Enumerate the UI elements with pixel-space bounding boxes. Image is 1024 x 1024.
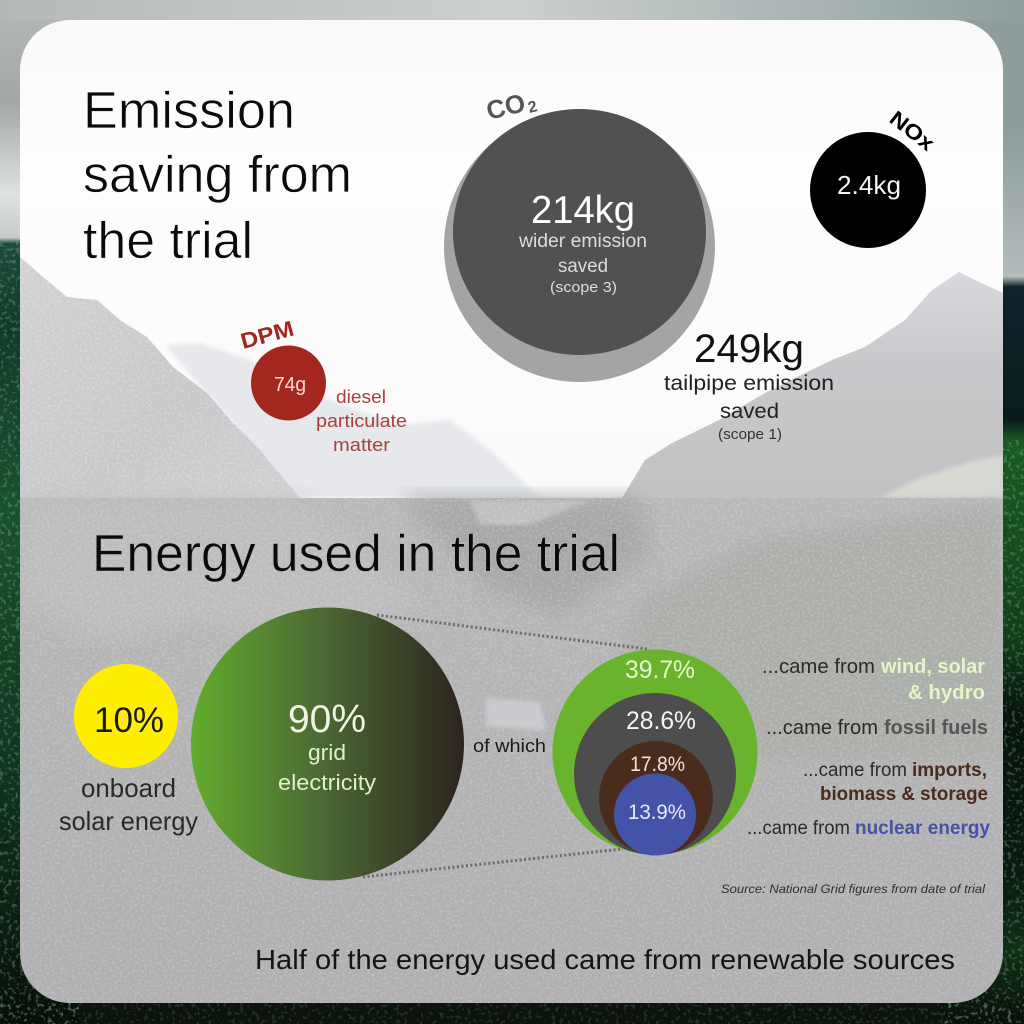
heading: emission saving: saving from [83,146,352,204]
text: diesel particulate matter: matter [333,435,390,455]
legend: imports biomass storage: biomass & storage [820,784,988,805]
circle: imports biomass storage: 17.8% [630,753,685,776]
text: diesel particulate matter: diesel [336,387,386,407]
legend: nuclear energy: ...came from [747,818,850,839]
circle: fossil fuels [574,693,736,855]
chart: NOx circle: 2.4kg [837,170,901,200]
text: diesel particulate matter: particulate [316,411,407,431]
legend: wind solar hydro: & hydro [908,682,985,704]
legend: imports biomass storage: imports, [912,760,987,781]
panel: emission section backdrop [20,20,1003,498]
circle: tailpipe emission 249kg [444,111,715,382]
circle: wind solar hydro [552,650,758,854]
label: CO2: 2 [526,98,539,117]
chart: grid electricity circle: 90% [288,698,366,741]
source note: Source: National Grid figures from date of trial [721,882,985,896]
chart: nested energy mix circles [552,650,758,856]
text: tailpipe emission value: (scope 1) [718,426,782,443]
legend: fossil fuels: ...came from [766,717,878,739]
panel: energy section backdrop [20,498,1003,1003]
chart: DPM circle [238,316,326,420]
text: of which: of which [473,736,546,756]
chart: CO2 nested circles [444,85,715,382]
legend: nuclear energy [747,818,990,839]
circle: nuclear [614,774,696,856]
chart: DPM circle: DPM [238,316,296,354]
heading: energy used: Energy used in the trial [92,525,620,583]
chart: onboard solar circle: 10% [94,701,164,740]
text: wider emission value: saved [558,256,608,277]
circle: wider emission 214kg [453,109,706,355]
legend: nuclear energy: nuclear energy [855,818,990,839]
text: tailpipe emission value: tailpipe emission [664,372,834,395]
text: tailpipe emission value [664,327,834,443]
chart: NOx circle [810,107,939,248]
heading: emission saving: Emission [83,82,295,140]
text: onboard solar energy [59,773,198,836]
text: tailpipe emission value: 249kg [694,327,804,371]
text: onboard solar energy: solar energy [59,806,198,836]
legend: imports biomass storage [803,760,988,805]
chart: grid electricity circle: grid [308,740,346,765]
text: diesel particulate matter [316,387,407,455]
chart: grid electricity circle: electricity [278,770,376,795]
chart: grid electricity circle [191,608,464,880]
text: wider emission value: 214kg [531,189,635,232]
text: tailpipe emission value: saved [720,400,779,423]
chart: onboard solar circle [74,664,178,768]
text: wider emission value: (scope 3) [550,279,617,296]
circle: nuclear: 13.9% [628,801,686,824]
text: onboard solar energy: onboard [81,773,176,803]
label: CO2: CO [483,87,528,126]
takeaway: Half of the energy used came from renewable sources [255,944,955,975]
chart: NOx circle: NOx [885,107,939,156]
text: wider emission value [518,189,647,296]
connector: dotted lines [363,615,647,877]
circle: imports biomass storage [599,741,713,855]
legend: fossil fuels [766,717,988,739]
legend: wind solar hydro: wind, solar [880,656,985,678]
circle: wind solar hydro: 39.7% [625,656,695,684]
heading: emission saving: the trial [83,212,253,270]
legend: imports biomass storage: ...came from [803,760,907,781]
circle: fossil fuels: 28.6% [626,707,696,735]
heading: emission saving [83,82,352,270]
legend: wind solar hydro [762,656,985,704]
text: wider emission value: wider emission [518,231,647,252]
legend: wind solar hydro: ...came from [762,656,875,678]
legend: fossil fuels: fossil fuels [884,717,988,739]
chart: DPM circle: 74g [274,374,306,396]
